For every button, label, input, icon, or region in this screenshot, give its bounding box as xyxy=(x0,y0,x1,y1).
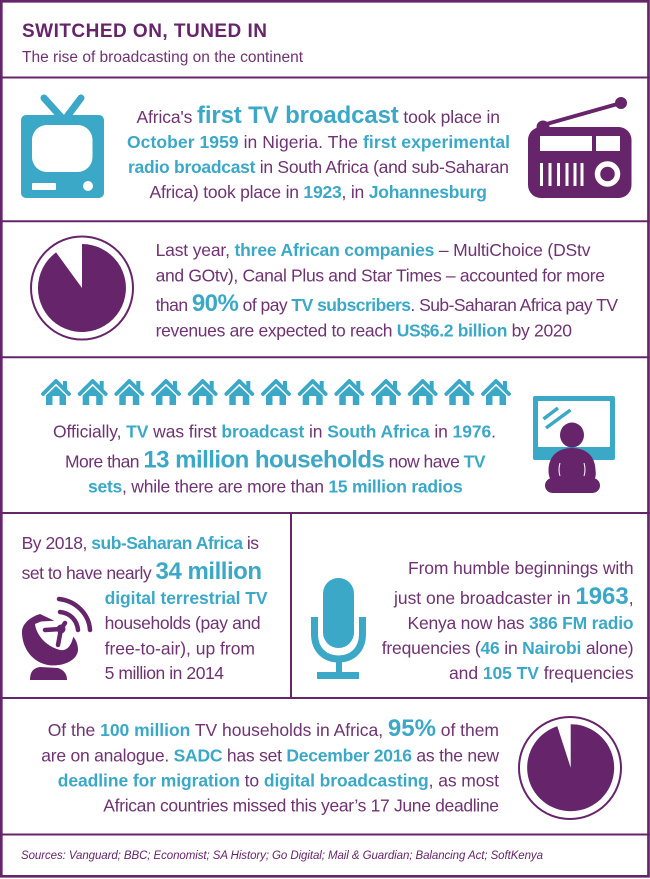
icon: person watching TV xyxy=(533,396,615,493)
icon: radio xyxy=(528,97,632,198)
text block: Kenya facts: frequencies (46 in Nairobi alone) xyxy=(382,638,634,658)
text block: migration facts: Of the 100 million TV households in Africa, 95% of them xyxy=(48,715,499,742)
text block: Kenya facts: Kenya now has 386 FM radio xyxy=(408,613,634,633)
text block: migration facts: deadline for migration to digital broadcasting, as most xyxy=(58,771,499,791)
sources: Sources: Vanguard; BBC; Economist; SA History; Go Digital; Mail & Guardian; Balancing Act; SoftKenya xyxy=(21,850,543,862)
text block: digital TV facts: households (pay and xyxy=(105,613,261,633)
text block: first broadcast facts: October 1959 in Nigeria. The first experimental xyxy=(127,132,510,152)
text block: pay TV facts: revenues are expected to reach US$6.2 billion by 2020 xyxy=(156,321,572,341)
panel: households xyxy=(0,358,650,513)
text block: households facts: sets, while there are more than 15 million radios xyxy=(88,477,463,497)
chart: pie 95 percent xyxy=(519,717,621,819)
text block: pay TV facts: Last year, three African companies – MultiChoice (DStv xyxy=(156,240,591,260)
icon: television xyxy=(21,98,104,198)
panel: digital migration xyxy=(0,699,650,834)
text block: first broadcast facts xyxy=(127,102,510,202)
text block: Kenya facts xyxy=(382,558,634,683)
text block: digital TV facts: digital terrestrial TV xyxy=(105,588,268,608)
text block: first broadcast facts: Africa's first TV broadcast took place in xyxy=(136,102,500,129)
text block: migration facts: African countries missed this year’s 17 June deadline xyxy=(103,796,499,816)
text block: households facts: More than 13 million households now have TV xyxy=(65,447,486,474)
text block: households facts: Officially, TV was first broadcast in South Africa in 1976. xyxy=(53,422,496,442)
icon: microphone xyxy=(314,578,362,679)
text block: migration facts xyxy=(41,715,499,816)
title: SWITCHED ON, TUNED IN xyxy=(22,21,267,42)
icon: satellite dish xyxy=(22,599,90,680)
icon row: thirteen houses xyxy=(43,381,509,405)
text block: Kenya facts: and 105 TV frequencies xyxy=(449,663,634,683)
text block: digital TV facts: set to have nearly 34 million xyxy=(22,558,262,585)
panel: first broadcasts xyxy=(0,78,650,221)
text block: first broadcast facts: radio broadcast in South Africa (and sub-Saharan xyxy=(128,157,509,177)
text block: Kenya facts: just one broadcaster in 1963, xyxy=(393,583,634,610)
text block: pay TV facts xyxy=(156,240,618,341)
text block: digital TV facts: 5 million in 2014 xyxy=(105,663,224,683)
text block: digital TV facts: free-to-air), up from xyxy=(105,639,255,659)
subtitle: The rise of broadcasting on the continent xyxy=(22,49,304,66)
text block: Kenya facts: From humble beginnings with xyxy=(408,558,634,578)
text block: first broadcast facts: Africa) took place in 1923, in Johannesburg xyxy=(150,182,487,202)
text block: households facts xyxy=(53,422,496,497)
text block: digital TV facts xyxy=(22,533,268,683)
panel: pay TV xyxy=(0,222,650,357)
text block: migration facts: are on analogue. SADC has set December 2016 as the new xyxy=(41,746,499,766)
chart: pie 90 percent xyxy=(31,236,133,340)
text block: pay TV facts: and GOtv), Canal Plus and Star Times – accounted for more xyxy=(156,266,605,286)
text block: pay TV facts: than 90% of pay TV subscribers. Sub-Saharan Africa pay TV xyxy=(156,290,618,317)
panel: title header xyxy=(0,0,650,77)
text block: digital TV facts: By 2018, sub-Saharan Africa is xyxy=(22,533,259,553)
panel: digital terrestrial TV xyxy=(0,514,290,697)
panel: Kenya frequencies xyxy=(292,514,647,697)
